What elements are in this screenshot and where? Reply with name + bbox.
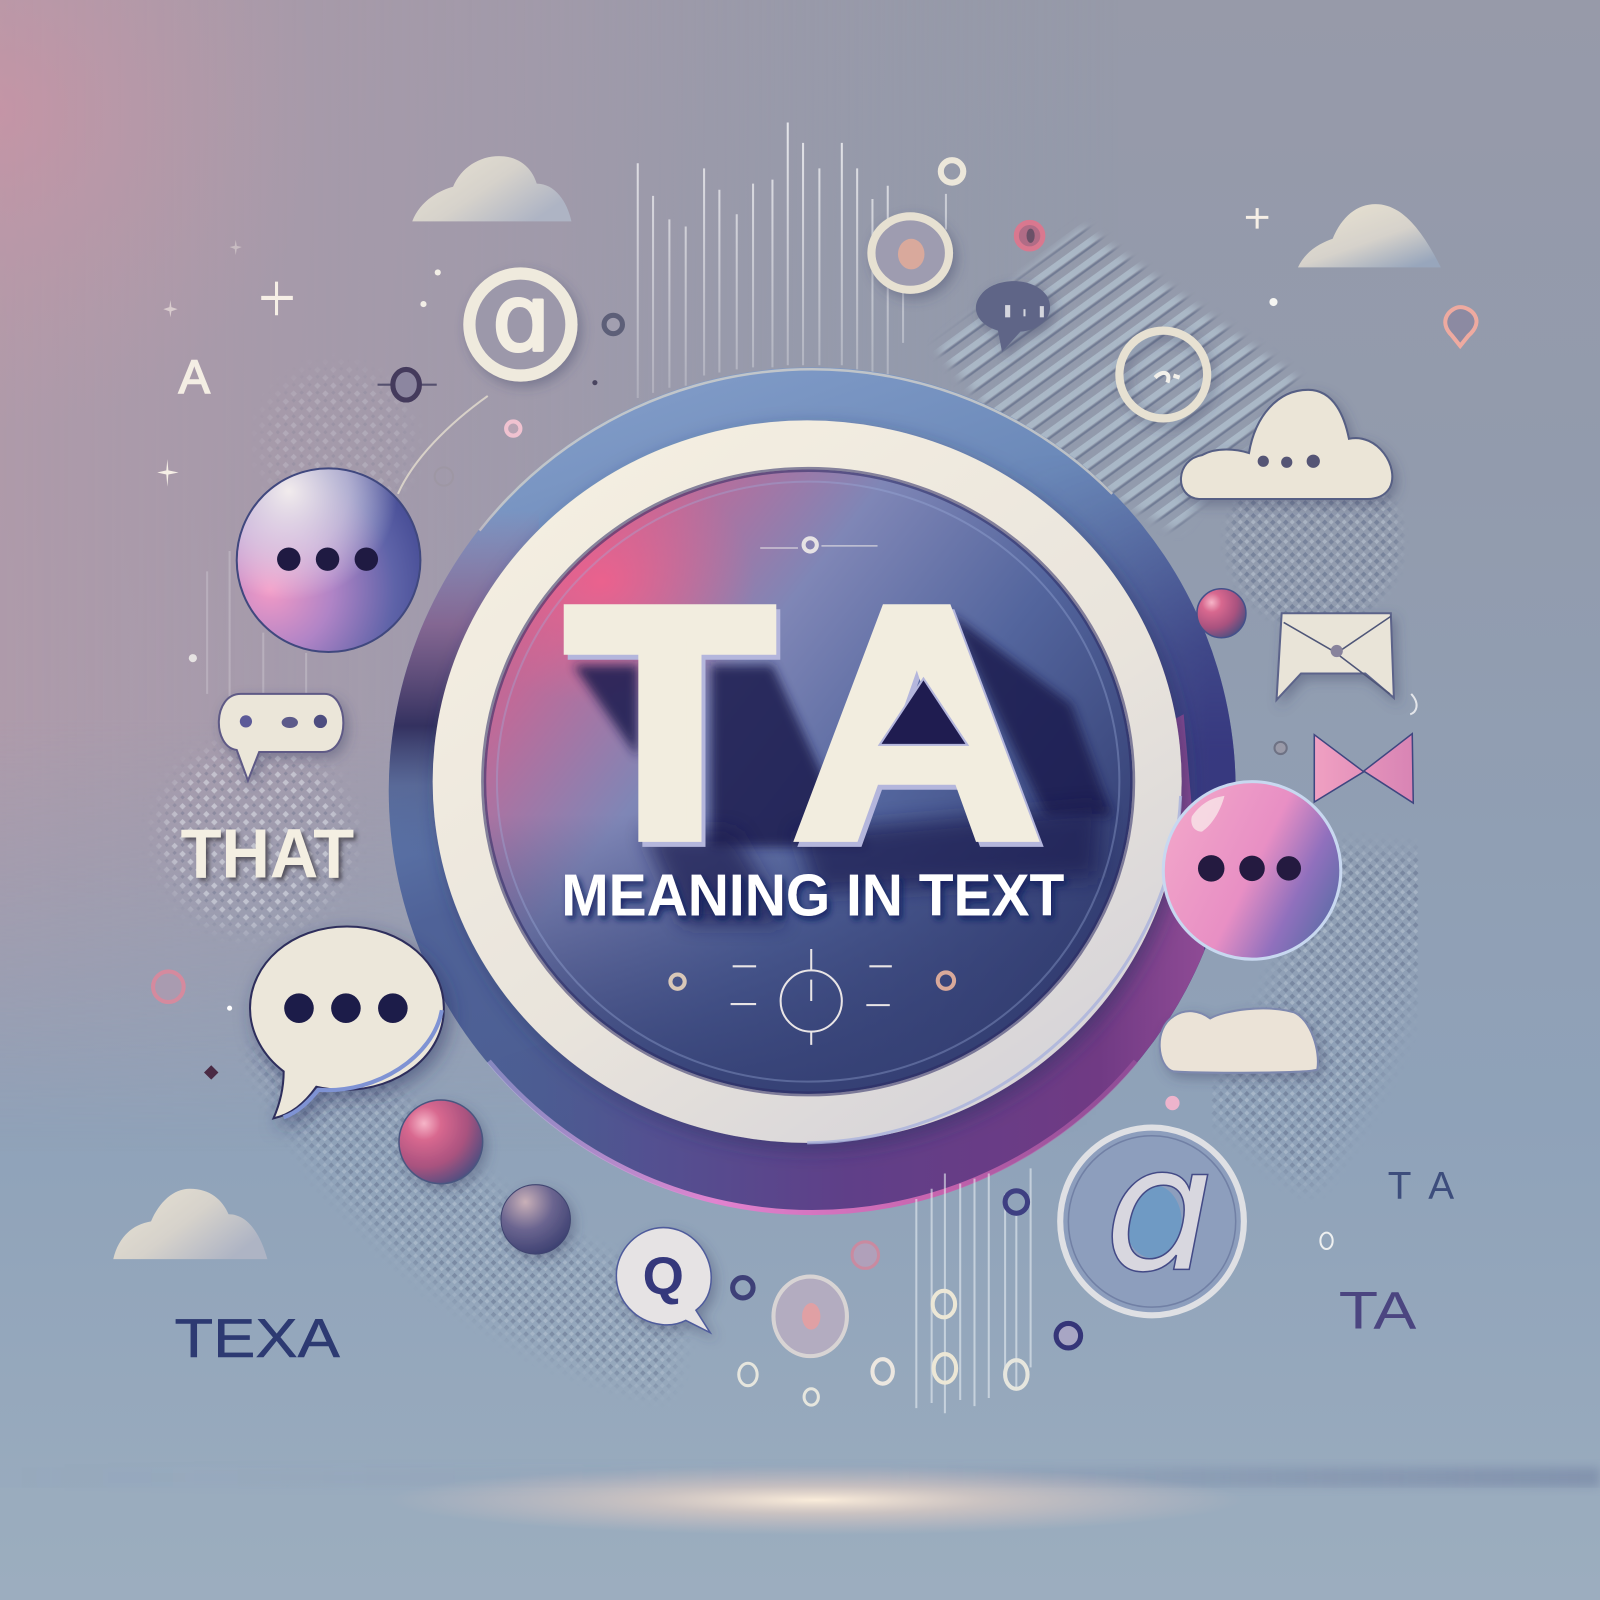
left dark band	[388, 524, 532, 820]
cream ring	[433, 420, 1182, 1143]
vertical lines top	[207, 122, 903, 704]
at-sign badge small	[469, 265, 571, 376]
cloud speech with dots	[1181, 390, 1392, 499]
sparkles and letter A	[157, 208, 1268, 487]
cloud bottom left	[113, 1189, 267, 1259]
letter A: A	[179, 351, 211, 403]
small right accents	[1165, 298, 1476, 1110]
sparkle	[157, 459, 179, 487]
small ring icons top left	[189, 269, 622, 662]
sparkle faint	[163, 300, 178, 317]
sparkle large	[261, 282, 293, 315]
letter shadows upper	[573, 612, 1112, 847]
large at-sign badge	[1060, 1108, 1244, 1315]
clock ornament	[670, 949, 954, 1045]
at-sign badge small: ɑ	[492, 265, 551, 372]
cloud top left	[412, 156, 571, 221]
slate sphere	[501, 1185, 570, 1254]
A counter	[880, 679, 967, 745]
top rim	[480, 369, 1112, 531]
left small markers	[153, 971, 232, 1080]
THAT label: THAT	[181, 815, 354, 893]
subtitle: MEANING IN TEXT	[561, 861, 1064, 928]
heading TA: TA	[567, 541, 1038, 903]
main disc	[386, 367, 1236, 1214]
inner disc	[449, 459, 1133, 1097]
dark speech bubble	[976, 281, 1050, 352]
sparkle right	[1246, 208, 1268, 229]
purple message sphere left	[237, 468, 420, 652]
pink bow	[1314, 734, 1413, 803]
large speech bubble	[250, 927, 444, 1118]
letter shadows lower	[643, 806, 1102, 923]
small clouds	[113, 156, 1441, 1259]
diagonal stripes patch	[938, 226, 1298, 531]
pink message sphere	[1163, 782, 1341, 959]
Q speech badge	[616, 1228, 711, 1333]
Q speech badge: Q	[643, 1247, 684, 1306]
pink sphere	[399, 1100, 483, 1184]
vertical lines bottom	[916, 1168, 1031, 1413]
ring with glyph	[1119, 331, 1207, 418]
halftone dot patches	[156, 372, 1418, 1394]
cream cloud block	[1160, 1008, 1318, 1073]
small pink sphere	[1197, 589, 1246, 638]
small grey dot	[1274, 742, 1287, 754]
TA small label: TA	[1388, 1165, 1454, 1208]
pink target badge	[773, 1277, 847, 1356]
top right ring icons	[871, 160, 1043, 290]
TA label lower: TA	[1339, 1282, 1417, 1341]
cloud top right	[1298, 204, 1441, 267]
crescent edge	[489, 1061, 1136, 1213]
purple crescent	[611, 714, 1204, 1210]
small speech bubble left	[219, 694, 343, 781]
top mini ornament	[760, 538, 878, 552]
TEXA label: TEXA	[174, 1307, 340, 1369]
sparkle faint	[230, 240, 242, 255]
large at-sign badge: ɑ	[1104, 1108, 1214, 1310]
right dark shade	[1093, 513, 1236, 1062]
small rings bottom	[733, 1191, 1333, 1405]
envelope	[1277, 613, 1394, 700]
outer blue disc	[389, 367, 1236, 1214]
